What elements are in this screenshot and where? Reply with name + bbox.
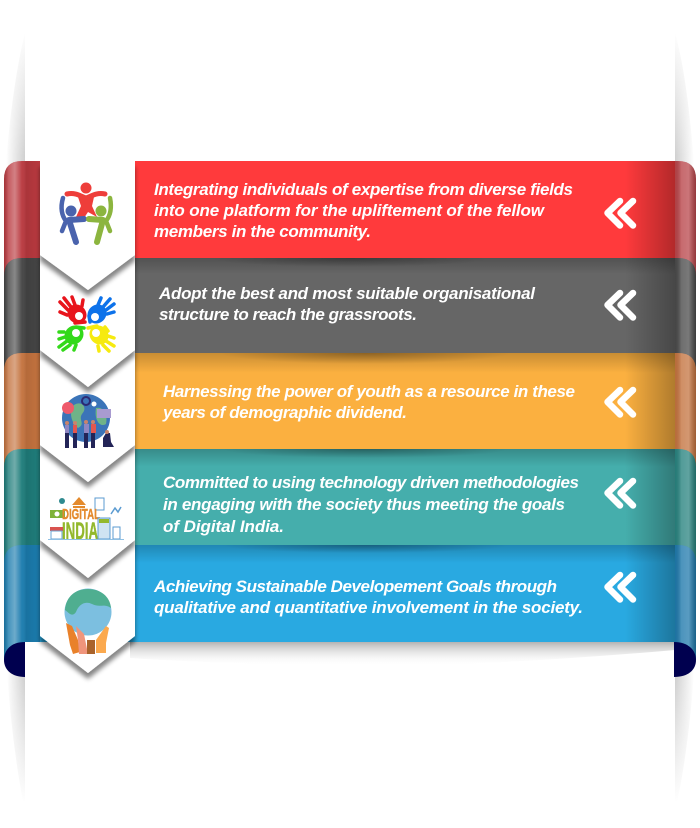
text: band 5 <box>153 577 583 617</box>
bank building <box>72 497 86 508</box>
arrow: band 1 double chevron <box>608 201 633 226</box>
shadow strip: bottom left <box>5 670 27 813</box>
chevron tab 5 <box>40 540 135 673</box>
band 5: blue <box>4 545 696 660</box>
text: band 1: into one platform for the upliftement of the fellow <box>154 201 546 220</box>
shadow strip: bottom right <box>673 670 696 813</box>
text: band 3: Harnessing the power of youth as a resource in these <box>163 382 575 401</box>
text: band 3 <box>162 382 575 422</box>
chevron tab 2 <box>40 255 135 387</box>
text: band 5: Achieving Sustainable Developement Goals through <box>153 577 557 596</box>
small globe <box>59 498 65 504</box>
text: band 1: Integrating individuals of expertise from diverse fields <box>154 180 573 199</box>
ground shadow under ribbon <box>130 642 675 666</box>
band 1: red <box>4 161 696 280</box>
shadow strip: top right <box>673 31 696 165</box>
hand: green <box>59 322 87 350</box>
chevron tab 4 <box>40 445 135 578</box>
ribbon curl: right <box>674 642 696 677</box>
text: band 1 <box>154 180 573 241</box>
band 2: dark grey <box>4 258 696 375</box>
icon: youth around a globe <box>62 394 114 448</box>
hand: red <box>60 297 90 327</box>
hand: blue <box>84 298 114 327</box>
ribbon curl: left <box>4 642 25 677</box>
text: band 2: Adopt the best and most suitable organisational <box>158 284 536 303</box>
icon: Digital India logo <box>48 497 124 545</box>
arrow: band 4 double chevron <box>608 481 633 506</box>
hand: yellow <box>86 322 114 351</box>
arrow: band 5 double chevron <box>608 575 633 600</box>
icon: hands holding the earth <box>64 588 112 654</box>
text: band 5: qualitative and quantitative involvement in the society. <box>154 598 583 617</box>
chevron tab 3 <box>40 350 135 482</box>
text: band 4: in engaging with the society thus meeting the goals <box>163 495 565 514</box>
text: band 2: structure to reach the grassroots. <box>159 305 417 324</box>
text: band 3: years of demographic dividend. <box>162 403 407 422</box>
band 4: teal <box>4 449 696 566</box>
shop <box>50 527 63 539</box>
banknote <box>50 510 65 518</box>
shadow strip: top left <box>4 31 27 165</box>
word: DIGITAL: DIGITAL <box>62 506 100 523</box>
baseline <box>48 539 124 540</box>
word: INDIA: INDIA <box>62 518 98 545</box>
text: band 1: members in the community. <box>154 222 371 241</box>
arrow: band 3 double chevron <box>608 390 633 414</box>
document <box>95 498 104 510</box>
text: band 4 <box>163 473 579 536</box>
icon: four coloured hands <box>59 297 114 351</box>
text: band 4: Committed to using technology driven methodologies <box>163 473 579 492</box>
chevron tab 1 <box>40 161 135 290</box>
arrow: band 2 double chevron <box>608 293 633 318</box>
line chart <box>111 507 121 514</box>
icon: three people in a circle <box>62 182 111 242</box>
band 3: orange <box>4 353 696 470</box>
text: band 4: of Digital India. <box>163 517 284 536</box>
calculator and phone <box>98 518 120 539</box>
text: band 2 <box>158 284 536 324</box>
